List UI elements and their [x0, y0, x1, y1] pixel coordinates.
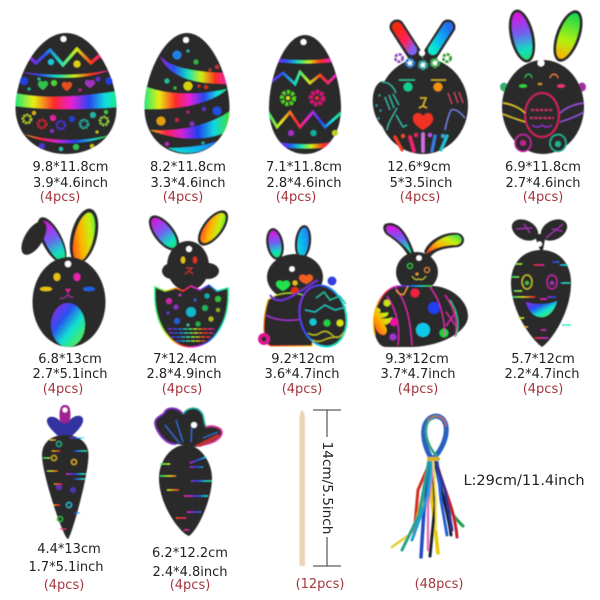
size label: wide carrot: (4pcs) [170, 578, 210, 593]
size label: egg 3: 7.1*11.8cm [266, 160, 342, 175]
ornament: wide carrot with leaves [155, 408, 222, 536]
size label: wide carrot [152, 546, 228, 593]
size label: slim carrot [28, 542, 104, 593]
size label: smiling carrot: (4pcs) [523, 382, 563, 397]
size label: bunny cracked egg: 7*12.4cm [153, 352, 217, 367]
size label: wide carrot: 2.4*4.8inch [152, 565, 228, 580]
size label: slim carrot: (4pcs) [44, 578, 84, 593]
size label: egg 2: (4pcs) [163, 190, 203, 205]
ornament: bunny with flower crown [370, 27, 468, 154]
size label: smiling carrot: 2.2*4.7inch [504, 367, 580, 382]
size label: egg 2 [150, 160, 226, 205]
size label: egg 2: 3.3*4.6inch [150, 176, 226, 191]
size label: bunny crown: (4pcs) [400, 190, 440, 205]
size label: egg 1: 9.8*11.8cm [33, 160, 108, 175]
ornament: egg with swooshes [144, 33, 230, 154]
quantity label: sticks: (12pcs) [296, 577, 344, 592]
size label: bunny crown: 12.6*9cm [387, 160, 451, 175]
ornament: bunny in cracked egg [143, 205, 234, 347]
size label: bunny cracked egg: (4pcs) [162, 382, 202, 397]
size label: bunny folded ear: 2.7*5.1inch [32, 367, 108, 382]
size label: bunny holding egg: (4pcs) [523, 190, 563, 205]
size label: bunny cracked egg [146, 352, 222, 397]
size label: bunny folded ear: 6.8*13cm [38, 352, 102, 367]
ornament: slim carrot with stars [42, 405, 88, 539]
size label: egg 1: (4pcs) [40, 190, 80, 205]
size label: sitting bunny [264, 352, 340, 397]
ornament: narrow egg with flowers [268, 35, 341, 154]
ornament: bunny on large egg [373, 223, 468, 347]
dimension line: stick length [313, 410, 341, 566]
size label: egg 3: (4pcs) [276, 190, 316, 205]
size label: wide carrot: 6.2*12.2cm [152, 546, 228, 561]
size label: bunny crown [387, 160, 452, 205]
size label: smiling carrot [504, 352, 580, 397]
size label: smiling carrot: 5.7*12cm [511, 352, 575, 367]
size label: bunny on egg: 9.3*12cm [385, 352, 449, 367]
ornament: sitting bunny with patterned egg [258, 224, 353, 352]
dimension label: stick length: 14cm/5.5inch [319, 442, 335, 534]
size label: bunny folded ear [32, 352, 108, 397]
wooden scratch stick [300, 410, 305, 566]
size label: bunny cracked egg: 2.8*4.9inch [146, 367, 222, 382]
size label: egg 2: 8.2*11.8cm [150, 160, 226, 175]
size label: egg 1: 3.9*4.6inch [33, 176, 108, 191]
size label: bunny holding egg: 2.7*4.6inch [505, 176, 581, 191]
size label: bunny crown: 5*3.5inch [390, 176, 452, 191]
size label: egg 3: 2.8*4.6inch [266, 176, 342, 191]
ornament: bunny holding egg [500, 7, 589, 154]
size label: bunny on egg: (4pcs) [398, 382, 438, 397]
size label: bunny on egg [380, 352, 456, 397]
ribbon length label: L:29cm/11.4inch [463, 473, 585, 489]
ornament: smiling carrot [508, 215, 571, 347]
size label: bunny holding egg [505, 160, 581, 205]
quantity label: ribbons: (48pcs) [415, 577, 463, 592]
size label: slim carrot: 4.4*13cm [37, 542, 101, 557]
size label: egg 3 [266, 160, 342, 205]
size label: sitting bunny: 9.2*12cm [271, 352, 335, 367]
size label: egg 1 [33, 160, 108, 205]
ornament: striped egg with zigzag [15, 33, 118, 154]
size label: sitting bunny: 3.6*4.7inch [264, 367, 340, 382]
size label: bunny on egg: 3.7*4.7inch [380, 367, 456, 382]
size label: bunny holding egg: 6.9*11.8cm [505, 160, 581, 175]
ribbon bundle [392, 416, 463, 557]
size label: bunny folded ear: (4pcs) [43, 382, 83, 397]
size label: sitting bunny: (4pcs) [282, 382, 322, 397]
size label: slim carrot: 1.7*5.1inch [28, 560, 104, 575]
ornament: bunny with folded ear [16, 206, 105, 347]
